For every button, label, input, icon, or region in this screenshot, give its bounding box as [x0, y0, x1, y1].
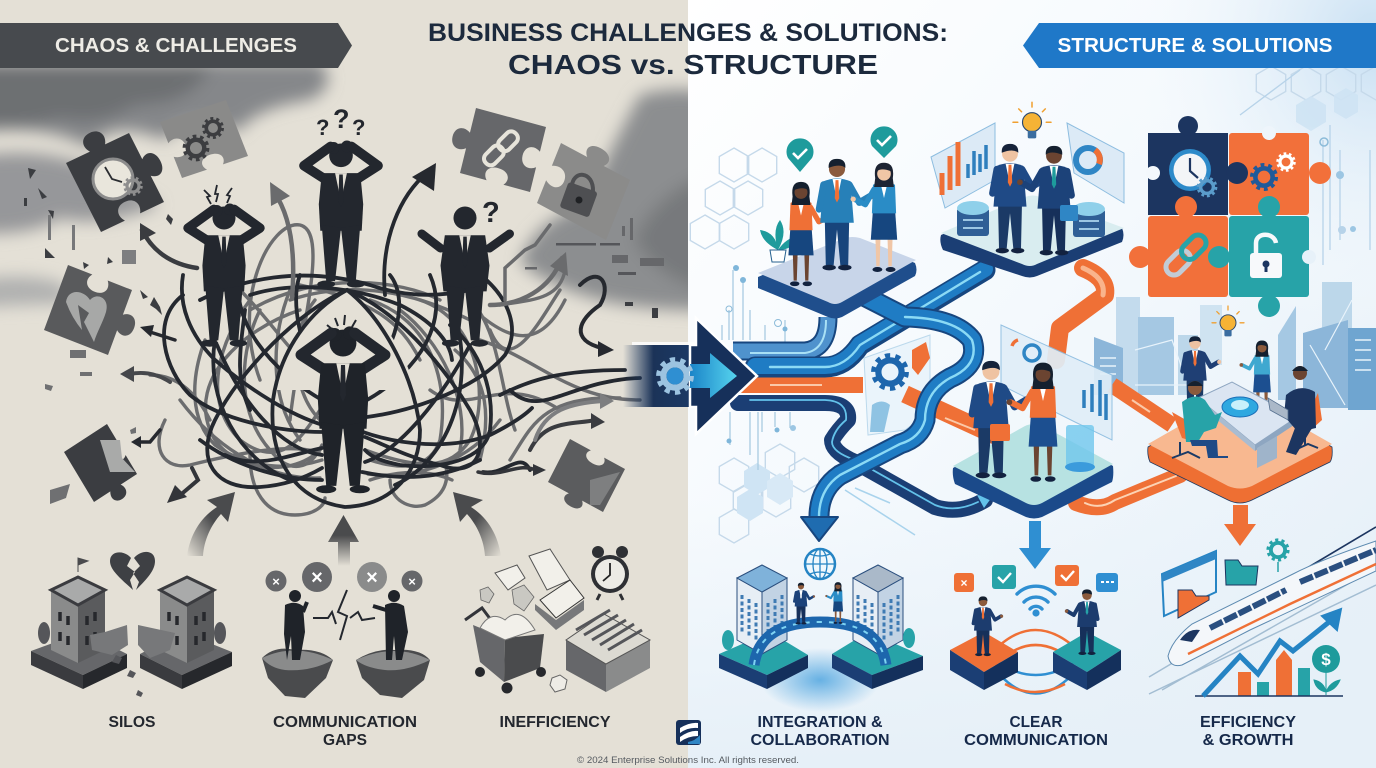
puzzle piece: broken heart	[44, 265, 146, 360]
feed arrow: communication gaps to chaos	[328, 515, 359, 566]
icon: efficiency and growth	[1149, 527, 1376, 696]
icon: check bubbles	[786, 126, 898, 172]
icon: communication gaps: ×	[311, 567, 323, 589]
puzzle piece: broken link	[445, 104, 546, 192]
person: right, shrugging	[422, 197, 510, 347]
header banner: chaos and challenges	[0, 23, 352, 68]
label: clear communication: COMMUNICATION	[964, 732, 1108, 749]
puzzle piece: clock	[58, 111, 178, 232]
puzzle piece: lower left	[64, 424, 144, 513]
label: efficiency and growth	[1200, 714, 1296, 749]
icon: silos towers	[31, 558, 232, 697]
label: efficiency and growth: EFFICIENCY	[1200, 714, 1296, 731]
icon: clear communication	[950, 565, 1121, 694]
person: centre, hands on head	[301, 315, 385, 493]
person: left, stressed	[188, 185, 260, 347]
pipe: blue to integration	[801, 295, 974, 541]
icon: broken heart	[110, 552, 155, 590]
pipe: orange diagonals	[905, 385, 1172, 440]
icon: lightbulb	[1013, 102, 1051, 138]
icon: inefficiency	[465, 546, 650, 694]
platform: centre handshake	[953, 361, 1113, 518]
icon: communication gaps: ×	[408, 574, 416, 589]
label: integration and collaboration	[750, 714, 890, 749]
panel: chaos background	[0, 0, 688, 768]
icon: integration and collaboration	[719, 549, 923, 712]
feed arrow: inefficiency to chaos	[453, 492, 501, 556]
platform: top team	[931, 123, 1124, 278]
hexagon network: right background	[690, 66, 1376, 543]
label: communication gaps	[273, 714, 417, 749]
label: silos: SILOS	[108, 714, 156, 731]
title: CHAOS vs. STRUCTURE	[508, 49, 878, 80]
pipe: orange to right platform	[1076, 475, 1180, 507]
arrow: down to clear communication	[1019, 521, 1051, 569]
pipe: orange to top platform	[1056, 268, 1105, 360]
icon: communication gaps: ×	[366, 567, 378, 589]
pipe: blue to left platform	[733, 317, 828, 353]
icon: efficiency and growth: $	[1321, 650, 1331, 669]
label: communication gaps: COMMUNICATION	[273, 714, 417, 731]
label: clear communication	[964, 714, 1108, 749]
panel: analytics hologram	[1001, 325, 1112, 440]
panel: structure background	[688, 0, 1376, 768]
city skyline	[1094, 282, 1376, 410]
tangled lines: grey strands	[150, 225, 640, 515]
puzzle piece: lock	[537, 130, 635, 240]
debris fragments	[24, 168, 664, 504]
icon: clear communication: ×	[960, 576, 968, 590]
storm clouds	[0, 62, 730, 310]
tangled lines: dark strands	[164, 172, 640, 507]
label: integration and collaboration: COLLABORATION	[750, 732, 890, 749]
person: top centre, hands on head: ?	[316, 115, 329, 140]
label: communication gaps: GAPS	[323, 732, 367, 749]
title: BUSINESS CHALLENGES & SOLUTIONS:	[428, 19, 948, 47]
puzzle piece: gears	[160, 100, 248, 178]
label: clear communication: CLEAR	[1010, 714, 1063, 731]
person: right, shrugging: ?	[482, 197, 500, 229]
panel: gear hologram	[864, 335, 930, 435]
copyright: © 2024 Enterprise Solutions Inc. All rights reserved.	[577, 755, 799, 766]
header banner: chaos and challenges: CHAOS & CHALLENGES	[55, 35, 297, 57]
logo	[676, 720, 701, 745]
header banner: structure and solutions	[1023, 23, 1376, 68]
header banner: structure and solutions: STRUCTURE & SOLUTIONS	[1058, 35, 1332, 57]
feed arrow: silos to chaos	[187, 492, 235, 556]
platform: left team	[758, 159, 916, 318]
pipe: blue to top platform	[755, 269, 985, 367]
central transition arrow	[623, 318, 757, 434]
puzzle: solved four pieces	[1129, 116, 1331, 317]
pipe: orange straight	[738, 377, 863, 393]
icon: lightbulb small	[1212, 306, 1244, 336]
person: top centre, hands on head: ?	[333, 104, 350, 134]
arrow: down to efficiency	[1224, 505, 1256, 546]
person: top centre, hands on head: ?	[352, 115, 365, 140]
chaos arrows	[120, 163, 614, 503]
puzzle piece: lower right	[543, 439, 625, 521]
person: top centre, hands on head	[304, 104, 378, 288]
platform: right meeting	[1148, 336, 1332, 503]
label: efficiency and growth: & GROWTH	[1202, 732, 1294, 749]
icon: communication gaps	[262, 562, 430, 698]
label: inefficiency: INEFFICIENCY	[500, 714, 611, 731]
icon: communication gaps: ×	[272, 574, 280, 589]
title	[428, 19, 948, 80]
label: integration and collaboration: INTEGRATION &	[758, 714, 883, 731]
pipe: navy to centre platform	[738, 400, 992, 510]
